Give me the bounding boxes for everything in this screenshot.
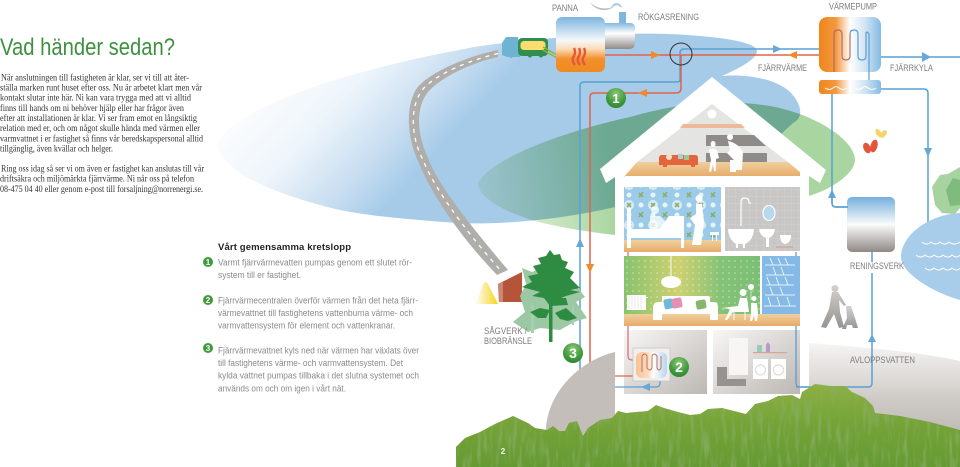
house body — [600, 77, 826, 410]
butterflies — [862, 128, 888, 154]
diagram labels: RÖKGASRENING — [638, 11, 699, 22]
heat exchanger — [633, 348, 670, 391]
blue landscape shape — [217, 34, 800, 223]
intro text: ställa marken runt huset efter oss. Nu är arbetet klart men vår — [0, 82, 203, 94]
diagram labels: BIOBRÄNSLE — [484, 335, 532, 346]
step 1: 1 — [206, 258, 211, 267]
step 3: kylda vattnet pumpas tillbaka i det slutna systemet och — [218, 370, 419, 382]
step 2: värmevattnet till fastighetens vattenburna värme- och — [218, 308, 413, 319]
diagram labels: PANNA — [552, 2, 579, 13]
step 3: 3 — [206, 344, 211, 353]
rökgasrening — [590, 2, 635, 49]
lake — [901, 213, 960, 300]
valve circle — [670, 43, 692, 65]
diagram labels: FJÄRRKYLA — [890, 62, 934, 73]
contact text: Ring oss idag så ser vi om även er fastighet kan anslutas till vår — [1, 164, 205, 174]
house — [600, 77, 826, 410]
flow arrows — [576, 45, 932, 391]
intro text: När anslutningen till fastigheten är klar, ser vi till att åter- — [1, 72, 189, 84]
basement left — [624, 330, 707, 394]
step 2: 2 — [206, 296, 211, 305]
diagram labels: RENINGSVERK — [850, 260, 905, 271]
badge 3: 3 — [569, 345, 577, 361]
grass — [456, 384, 960, 467]
step 1 — [203, 257, 412, 281]
diagram labels: AVLOPPSVATTEN — [850, 354, 915, 365]
badge 3 — [563, 343, 583, 363]
badge 2 — [669, 357, 689, 377]
badge 1: 1 — [612, 91, 620, 106]
reningsverk — [832, 194, 895, 252]
title: Vad händer sedan? — [0, 34, 175, 61]
intro text: tillgänglig, även kvällar och helger. — [0, 144, 113, 154]
intro text: efter att installationen är klar. Vi ser fram emot en långsiktig — [0, 113, 197, 124]
diagram labels — [484, 0, 934, 365]
pine trees — [513, 250, 587, 342]
bathroom — [725, 187, 800, 251]
intro text: kontakt slutar inte här. Ni kan vara trygga med att vi alltid — [0, 94, 191, 104]
contact text: 08-475 04 40 eller genom e-post till forsaljning@norrenergi.se. — [0, 184, 203, 195]
step 2: varmvattensystem för element och vattenkranar. — [218, 320, 395, 332]
sawmill with sawdust — [475, 272, 522, 304]
step 3: Fjärrvärmevattnet kyls ned när värmen har växlats över — [218, 346, 420, 356]
heading: kretslopp: Vårt gemensamma kretslopp — [218, 242, 351, 253]
intro text: relation med er, och om något skulle hända med värmen eller — [0, 123, 201, 134]
contact text: driftsäkra och miljömärkta fjärrvärme. Ni når oss på telefon — [0, 174, 194, 184]
grey hills — [546, 343, 960, 440]
intro text: varmvattnet i er fastighet så finns vår beredskapspersonal alltid — [0, 134, 203, 144]
intro text: finns till hands om ni behöver hjälp eller har frågor även — [0, 103, 184, 114]
badge 2: 2 — [675, 359, 683, 375]
step 3: används om och om igen i vårt nät. — [218, 384, 346, 394]
diagram labels: VÄRMEPUMP — [829, 0, 877, 12]
värmepump — [819, 17, 881, 94]
green landscape shape — [478, 102, 855, 240]
attic room — [624, 104, 800, 177]
badge 1 — [606, 88, 626, 108]
step 2: Fjärrvärmecentralen överför värmen från det heta fjärr- — [218, 296, 418, 306]
truck — [502, 37, 557, 58]
page number: 2 — [501, 447, 506, 456]
bedroom — [624, 187, 721, 252]
intro text — [0, 72, 203, 154]
pipes — [580, 49, 960, 387]
lake tree — [932, 167, 960, 214]
step 3: till fastighetens värme- och varmvattensystem. Det — [218, 358, 403, 369]
step 1: Varmt fjärrvärmevatten pumpas genom ett slutet rör- — [218, 258, 412, 268]
diagram labels: FJÄRRVÄRME — [758, 62, 807, 73]
basement right — [713, 330, 800, 394]
sewage pipes over hill — [796, 348, 872, 387]
step 3 — [203, 343, 420, 394]
person with stroller — [821, 285, 858, 329]
step 2 — [203, 295, 418, 332]
living room — [624, 256, 800, 326]
step 1: system till er fastighet. — [218, 270, 301, 281]
contact text — [0, 164, 205, 195]
house pipes — [600, 252, 811, 387]
road — [409, 50, 508, 275]
panna — [556, 17, 605, 72]
diagram labels: SÅGVERK / — [484, 325, 527, 336]
